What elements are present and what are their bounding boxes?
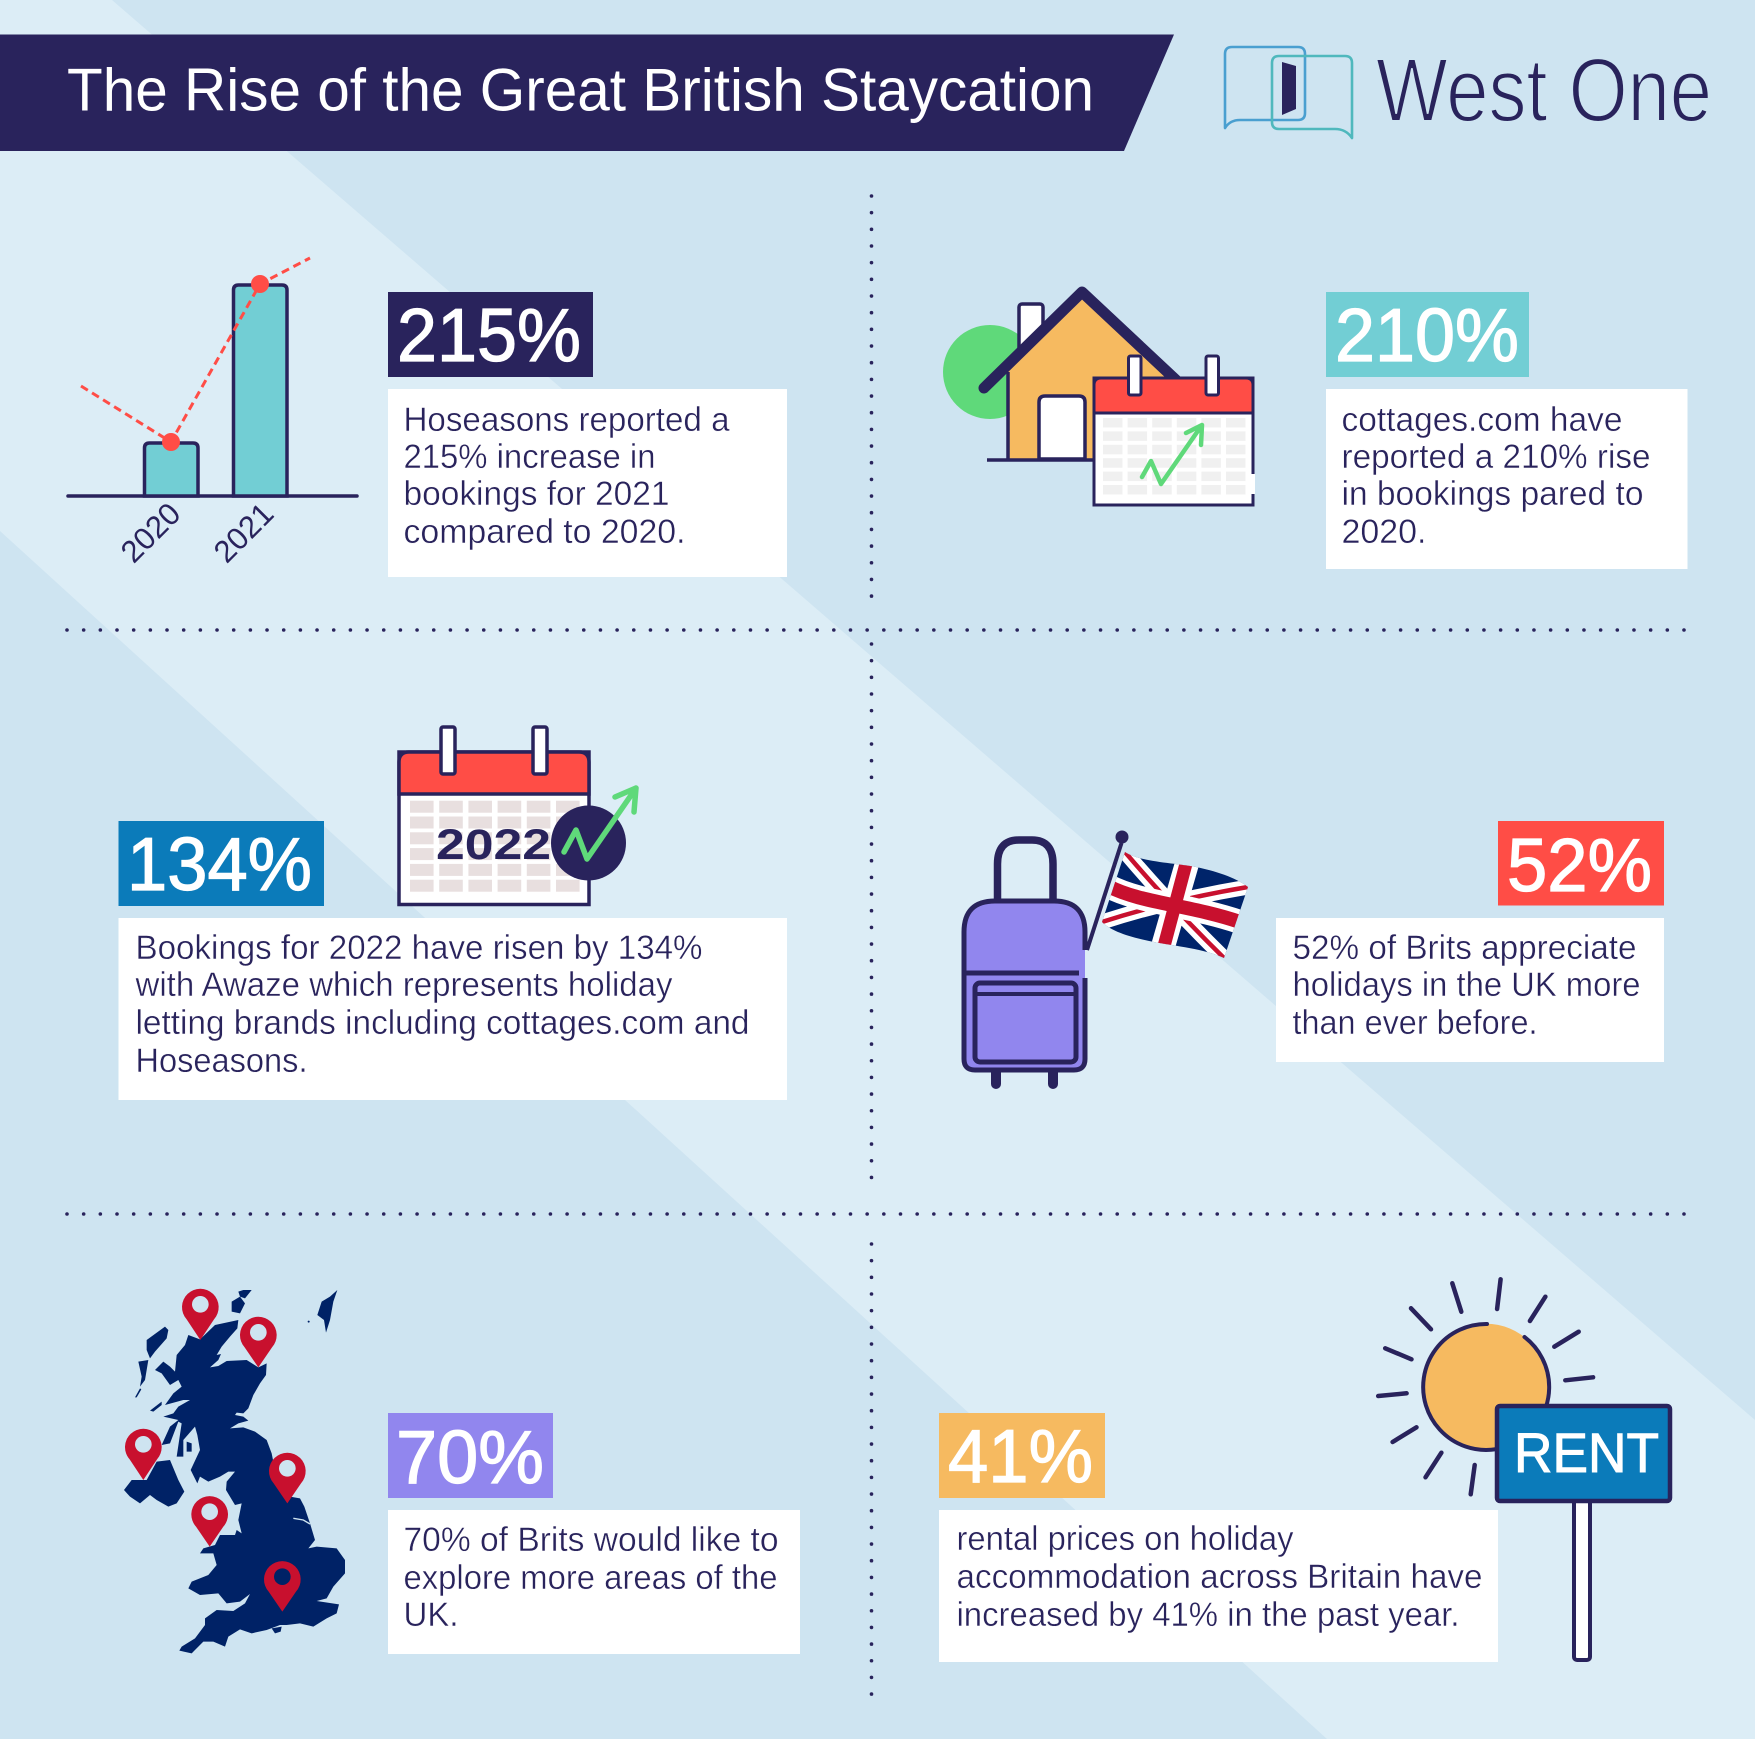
text block: cottages.com	[1326, 389, 1688, 569]
text block: rental prices: increased by 41% in the past year.	[956, 1596, 1460, 1634]
text block: Awaze: letting brands including cottages.com and	[136, 1004, 750, 1042]
text block: explore more areas: explore more areas of the	[404, 1559, 778, 1597]
icon: 2022 calendar with rising arrow: 2022	[436, 821, 551, 869]
panel: 52% appreciate UK holidays	[962, 821, 1664, 1088]
text block: rental prices: rental prices on holiday	[956, 1520, 1294, 1558]
stat: 134%: 134%	[127, 822, 312, 906]
stat: 52%: 52%	[1507, 823, 1652, 907]
bar chart: 2020 vs 2021: 2020	[114, 496, 187, 569]
stat: 70%: 70%	[396, 1415, 544, 1499]
panel: 134% Awaze bookings for 2022	[118, 727, 787, 1100]
icon: house and calendar	[943, 292, 1255, 505]
bar chart: 2020 vs 2021: 2021	[207, 496, 280, 569]
text block: explore more areas: UK.	[404, 1596, 458, 1634]
text block: rental prices	[939, 1510, 1498, 1662]
logo: West One	[1225, 41, 1712, 141]
text block: cottages.com: reported a 210% rise	[1342, 438, 1650, 476]
text block: Brits appreciate: holidays in the UK more	[1292, 966, 1640, 1004]
text block: Brits appreciate: 52% of Brits appreciate	[1292, 929, 1636, 967]
panel: 41% rental prices	[939, 1279, 1670, 1662]
icon: UK map with pins	[124, 1289, 345, 1653]
text block: rental prices: accommodation across Britain have	[956, 1558, 1482, 1596]
text block: Awaze: Bookings for 2022 have risen by 134%	[136, 929, 702, 967]
text block: Awaze: Hoseasons.	[136, 1042, 308, 1080]
bar chart: 2020 vs 2021	[68, 258, 357, 569]
icon: sun	[1378, 1279, 1593, 1494]
stat: 41%: 41%	[948, 1414, 1093, 1498]
text block: explore more areas	[388, 1510, 800, 1654]
text block: Hoseasons: compared to 2020.	[404, 513, 686, 551]
stat: 215%: 215%	[397, 293, 581, 377]
text block: Awaze	[118, 918, 787, 1100]
icon: suitcase	[962, 840, 1088, 1088]
text block: Hoseasons: 215% increase in	[404, 438, 656, 476]
panel: 210% cottages.com	[943, 292, 1688, 569]
text block: cottages.com: 2020.	[1342, 513, 1426, 551]
text block: cottages.com: cottages.com have	[1342, 401, 1622, 439]
text block: Awaze: with Awaze which represents holiday	[135, 966, 673, 1004]
text block: Brits appreciate	[1276, 918, 1664, 1062]
text block: Hoseasons: bookings for 2021	[404, 475, 670, 513]
icon: speech bubbles with door	[1225, 47, 1352, 138]
title: The Rise of the Great British Staycation	[67, 56, 1094, 124]
stat: 210%: 210%	[1335, 293, 1519, 377]
text block: Brits appreciate: than ever before.	[1292, 1004, 1538, 1042]
text block: Hoseasons	[388, 389, 787, 577]
icon: 2022 calendar with rising arrow	[399, 727, 636, 904]
icon: rent sign: RENT	[1514, 1421, 1659, 1484]
text block: explore more areas: 70% of Brits would like to	[404, 1521, 778, 1559]
title banner	[0, 34, 1174, 151]
panel: 70% explore more of UK	[124, 1289, 800, 1654]
icon: union jack flag	[1087, 830, 1255, 965]
icon: rent sign	[1497, 1406, 1670, 1660]
text block: Hoseasons: Hoseasons reported a	[404, 401, 730, 439]
text block: cottages.com: in bookings pared to	[1342, 475, 1644, 513]
panel: 215% bookings increase	[68, 258, 787, 577]
